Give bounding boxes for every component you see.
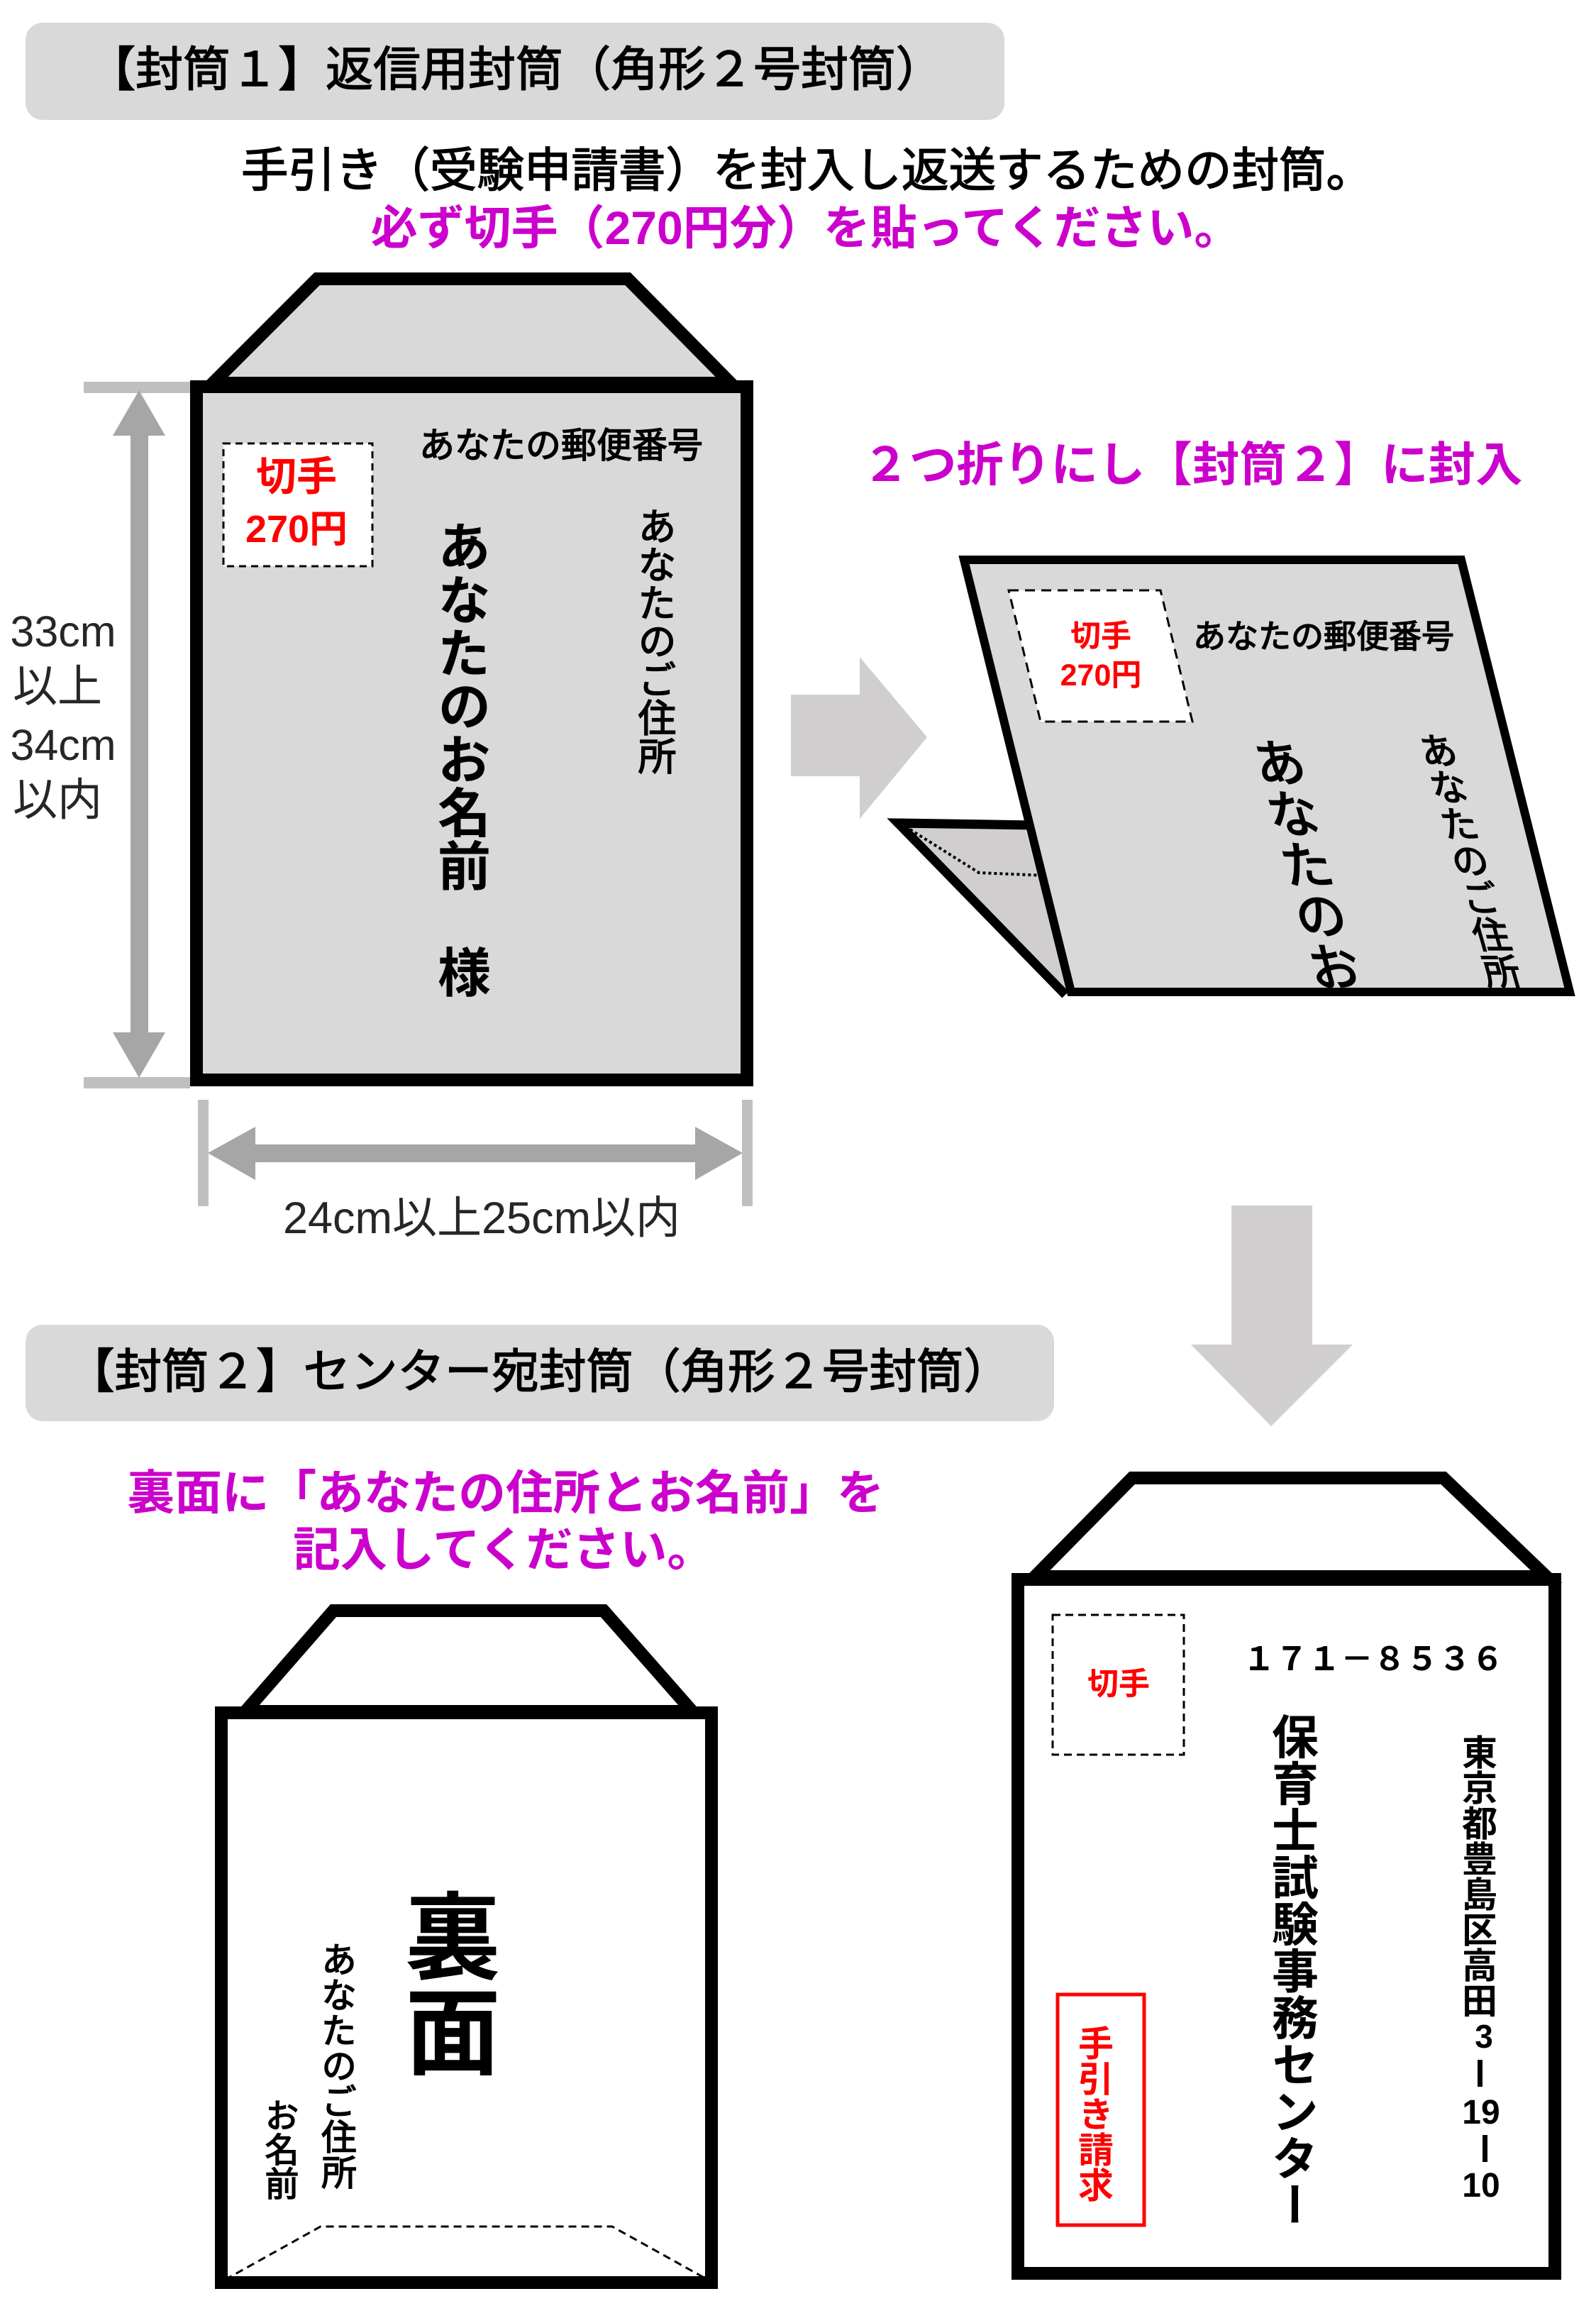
back name: お名前 [260,2098,298,2200]
heading: envelope 2 [26,1325,1054,1421]
envelope 1 recipient address: あなたのご住所 [632,507,675,775]
folded recipient name, clipped by the fold: あなたのお名前 [1240,737,1392,1094]
envelope 2 front [1018,1478,1555,2273]
request label box [1058,1995,1144,2225]
center address: 19 [1462,2094,1500,2131]
text block: envelope 1 description: 必ず切手（270円分）を貼ってください。 [371,202,1241,254]
center name: 保育士試験事務センター [1265,1713,1318,2228]
height labels: 以内 [13,776,102,825]
back address: あなたのご住所 [316,1941,356,2190]
back flap [245,1611,692,1711]
heading: envelope 2: 【封筒２】センター宛封筒（角形２号封筒） [67,1346,1011,1399]
heading: fold instruction: ２つ折りにし【封筒２】に封入 [863,439,1522,492]
request label box: 手引き請求 [1073,2025,1113,2202]
heading: envelope 1 [26,23,1004,120]
envelope 1 stamp box [223,443,372,566]
envelope 1 stamp box: 270円 [245,508,348,551]
heading: envelope 1: 【封筒１】返信用封筒（角形２号封筒） [88,43,943,96]
front flap [1035,1478,1546,1577]
height labels [10,607,116,825]
envelope 1 stamp box: 切手 [256,454,337,500]
text block: envelope 1 description [241,145,1373,254]
front stamp box [1053,1615,1184,1755]
folded stamp box: 切手 [1070,619,1131,653]
envelope 1 body [196,387,747,1080]
arrow: right [791,657,927,819]
folded envelope illustration [887,556,1575,998]
text block: envelope 1 description: 手引き（受験申請書）を封入し返送するための封筒。 [241,145,1373,197]
height labels: 以上 [13,662,102,712]
arrow: down [1191,1206,1353,1426]
folded envelope face [964,560,1570,992]
back body [221,1713,711,2283]
front body [1018,1579,1555,2273]
back bottom flap dashes [225,2227,708,2280]
center address: 東京都豊島区高田 [1457,1734,1497,2018]
envelope 1 recipient name: あなたのお名前 様 [430,519,489,998]
width dimension arrow [198,1100,753,1206]
height labels: 33cm [10,607,116,656]
back label: 裏面 [392,1888,499,2078]
envelope 1 flap [213,279,731,383]
front stamp box: 切手 [1087,1667,1150,1701]
folded stamp box [1009,590,1192,722]
folded recipient address, clipped by the fold: あなたのご住所 [1409,732,1524,990]
envelope 2 back [221,1611,711,2283]
height dimension arrow [84,382,190,1088]
text block: back side instruction: 裏面に「あなたの住所とお名前」を [127,1467,885,1520]
postal code: １７１－８５３６ [1243,1640,1504,1677]
text block: back side instruction: 記入してください。 [293,1524,714,1577]
height labels: 34cm [10,721,116,769]
width label: 24cm以上25cm以内 [283,1193,680,1243]
folded stamp box: 270円 [1060,658,1141,693]
folded postal code label: あなたの郵便番号 [1193,618,1454,655]
center address: 3 [1475,2018,1493,2055]
folded flap [898,823,1068,995]
text block: back side instruction [127,1467,885,1577]
envelope 1 postal code label: あなたの郵便番号 [419,426,703,465]
center address [1457,1734,1500,2205]
envelope 1 front [196,279,747,1080]
center address: 10 [1462,2167,1500,2205]
